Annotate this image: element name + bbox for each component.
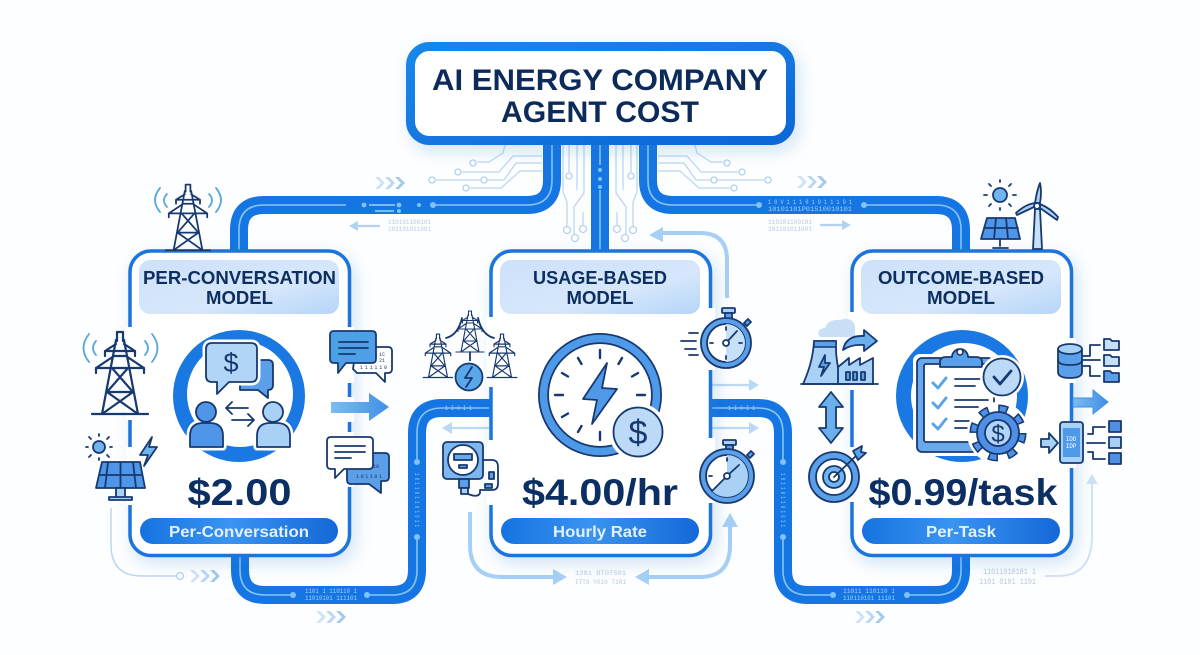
header: per-conversation: PER-CONVERSATION	[143, 267, 336, 288]
icon: chat bubbles with arrow: 101101	[356, 474, 382, 480]
title text: AI ENERGY COMPANY	[432, 64, 768, 97]
connector pipes: 1 I 0 I 1	[728, 405, 755, 412]
icon: solar panel with sun and bolt	[86, 434, 157, 500]
connector pipes: 1 0 V 1 1 1 0 1 0 1 1 1 0 1	[768, 199, 852, 206]
icon: phone with outputs: IDD	[1066, 436, 1077, 443]
light arrows around usage panel	[442, 227, 759, 585]
flow markers and binary labels: 11011010101 1	[983, 568, 1036, 577]
icon: phone with outputs	[1041, 421, 1121, 464]
icon: stopwatch lower	[700, 440, 754, 503]
icon: conversation circle: $	[223, 348, 239, 378]
icon: transmission tower top left	[155, 185, 221, 250]
icon: conversation circle	[173, 330, 305, 462]
icon: electric meter	[443, 442, 498, 496]
icon: clipboard with check and gear: $	[991, 421, 1005, 448]
icon: target and dart	[809, 446, 866, 502]
header: usage-based: USAGE-BASED	[533, 267, 667, 288]
price: $2.00: $2.00	[188, 471, 292, 513]
flow markers and binary labels: 101101011001	[388, 226, 431, 233]
connector pipes: 1 0 1 1 0 1 1 0 1 0 1 1	[779, 473, 786, 527]
panel: outcome-based model	[848, 251, 1076, 556]
icon: double arrow	[819, 392, 843, 443]
connector pipes: 1 I 0 I 1	[445, 405, 472, 412]
icon: chat bubbles with arrow: 10	[373, 464, 379, 470]
flow markers and binary labels: 1101 0101 1101	[979, 578, 1036, 587]
connector pipes: 11011 110110 1	[843, 588, 895, 595]
price: $0.99/task: $0.99/task	[868, 471, 1058, 513]
icon: power grid with bolt	[423, 311, 517, 393]
connector pipes: 11010101 111101	[305, 595, 357, 602]
header: outcome-based	[861, 260, 1061, 314]
icon: clock with bolt and coin: $	[629, 414, 648, 452]
connector pipes: 110110101 11101	[843, 595, 895, 602]
icon: chat bubbles with arrow: 21	[379, 358, 385, 364]
icon: power plant and factory	[801, 319, 878, 384]
header: outcome-based: OUTCOME-BASED	[878, 267, 1044, 288]
flow markers and binary labels: 101101011001	[768, 226, 812, 233]
header: per-conversation	[139, 260, 339, 314]
header: usage-based	[500, 260, 700, 314]
pill: hourly rate	[501, 518, 699, 544]
header: outcome-based: MODEL	[927, 287, 995, 308]
icon: clock with bolt and coin	[544, 338, 667, 461]
connector pipes: 1101 1 110110 1	[305, 588, 357, 595]
panel: per-conversation model	[126, 251, 354, 556]
price: $4.00/hr: $4.00/hr	[522, 471, 678, 513]
icon: chat bubbles with arrow: 111110	[360, 365, 387, 371]
arrow: outcome panel to data	[1073, 390, 1108, 414]
connector pipes	[239, 140, 961, 602]
icon: sun solar panel wind turbine	[981, 180, 1058, 249]
pill: per-task: Per-Task	[926, 524, 996, 541]
pill: per-task	[862, 518, 1060, 544]
icon: clipboard with check and gear	[896, 330, 1029, 464]
title box	[410, 46, 790, 140]
circuit traces under title	[429, 145, 771, 242]
flow markers and binary labels: 110101100101	[388, 219, 431, 226]
icon: phone with outputs: IDP	[1066, 443, 1077, 450]
flow markers and binary labels: 110101100101	[768, 219, 812, 226]
panel: usage-based model	[487, 251, 715, 556]
icon: chat bubbles with arrow: 1C	[379, 352, 385, 358]
pill: per-conversation	[140, 518, 338, 544]
pill: per-conversation: Per-Conversation	[169, 524, 309, 541]
icon: stopwatch upper	[681, 308, 751, 368]
flow markers and binary labels	[111, 176, 1098, 623]
flow markers and binary labels: 1381 BT0T501	[575, 570, 626, 577]
icon: transmission tower with signal	[84, 332, 158, 414]
title text: AGENT COST	[501, 96, 699, 129]
header: usage-based: MODEL	[566, 287, 634, 308]
connector pipes: 10101101P01510010101	[768, 206, 852, 213]
icon: database with folders	[1058, 339, 1119, 382]
connector pipes: 1 0 1 1 0 1 1 0 1 0 1 1	[413, 473, 420, 527]
header: per-conversation: MODEL	[206, 287, 273, 308]
icon: chat bubbles with arrow	[327, 331, 392, 493]
pill: hourly rate: Hourly Rate	[553, 524, 647, 541]
flow markers and binary labels: ITT0 Y010 T101	[575, 579, 626, 586]
